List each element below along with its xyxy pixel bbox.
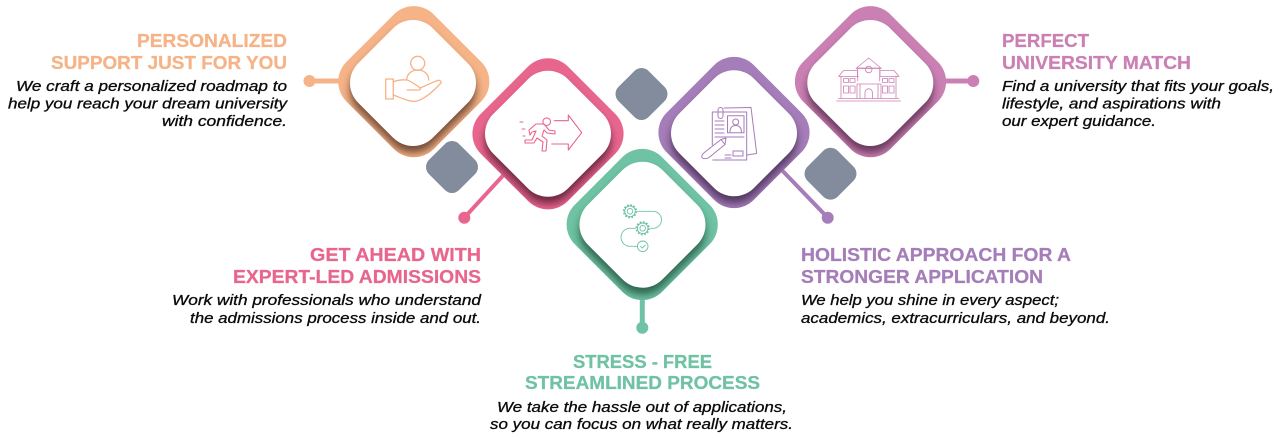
- heading: [233, 244, 481, 287]
- connector: magenta: [940, 75, 979, 87]
- icon: gears process path: [621, 205, 662, 252]
- body text: [801, 293, 1110, 327]
- body text: We craft a personalized roadmap to: [16, 79, 287, 95]
- icon: running person with arrow: [520, 115, 582, 151]
- text block: holistic approach: [801, 244, 1110, 327]
- heading: HOLISTIC APPROACH FOR A: [801, 244, 1071, 265]
- heading: SUPPORT JUST FOR YOU: [51, 52, 287, 73]
- connector: orange: [304, 75, 345, 87]
- text block: stress-free process: [490, 351, 793, 433]
- heading: UNIVERSITY MATCH: [1002, 52, 1191, 73]
- body text: Find a university that fits your goals,: [1002, 79, 1274, 95]
- diamond: university match: [794, 6, 946, 158]
- body text: [490, 400, 793, 433]
- heading: [801, 244, 1071, 287]
- text block: university match: [1002, 30, 1274, 130]
- diamond: holistic approach: [658, 56, 810, 208]
- heading: EXPERT-LED ADMISSIONS: [233, 266, 481, 287]
- connector: purple: [775, 163, 834, 224]
- icon: application document with pencil: [702, 108, 757, 160]
- decorative gray diamond left: [422, 137, 482, 197]
- connector: green: [636, 290, 648, 334]
- diamond: expert-led admissions: [472, 58, 624, 210]
- body text: the admissions process inside and out.: [190, 311, 481, 327]
- body text: We take the hassle out of applications,: [497, 400, 787, 416]
- body text: Work with professionals who understand: [172, 293, 482, 309]
- heading: [51, 30, 287, 73]
- diamond: stress-free process: [566, 148, 718, 300]
- heading: PERSONALIZED: [137, 30, 287, 51]
- heading: [1002, 30, 1191, 73]
- body text: our expert guidance.: [1002, 114, 1156, 130]
- body text: [172, 293, 482, 327]
- body text: We help you shine in every aspect;: [801, 293, 1059, 309]
- diamond: personalized support: [338, 6, 490, 158]
- decorative gray diamond right: [800, 144, 861, 204]
- icon: university building: [837, 58, 901, 101]
- heading: PERFECT: [1002, 30, 1090, 51]
- body text: [1002, 79, 1274, 130]
- icon: hand holding person: [386, 56, 441, 101]
- connector: pink: [458, 168, 510, 224]
- text block: expert-led admissions: [172, 244, 482, 327]
- body text: academics, extracurriculars, and beyond.: [801, 311, 1110, 327]
- body text: with confidence.: [162, 114, 287, 130]
- decorative gray diamond center: [611, 64, 672, 124]
- heading: [525, 351, 760, 393]
- text block: personalized support: [8, 30, 289, 130]
- body text: [8, 79, 289, 130]
- body text: lifestyle, and aspirations with: [1002, 96, 1221, 112]
- heading: STRESS - FREE: [573, 351, 712, 372]
- body text: help you reach your dream university: [8, 96, 289, 112]
- heading: STREAMLINED PROCESS: [525, 372, 760, 393]
- heading: GET AHEAD WITH: [310, 244, 481, 265]
- body text: so you can focus on what really matters.: [490, 417, 793, 433]
- heading: STRONGER APPLICATION: [801, 266, 1043, 287]
